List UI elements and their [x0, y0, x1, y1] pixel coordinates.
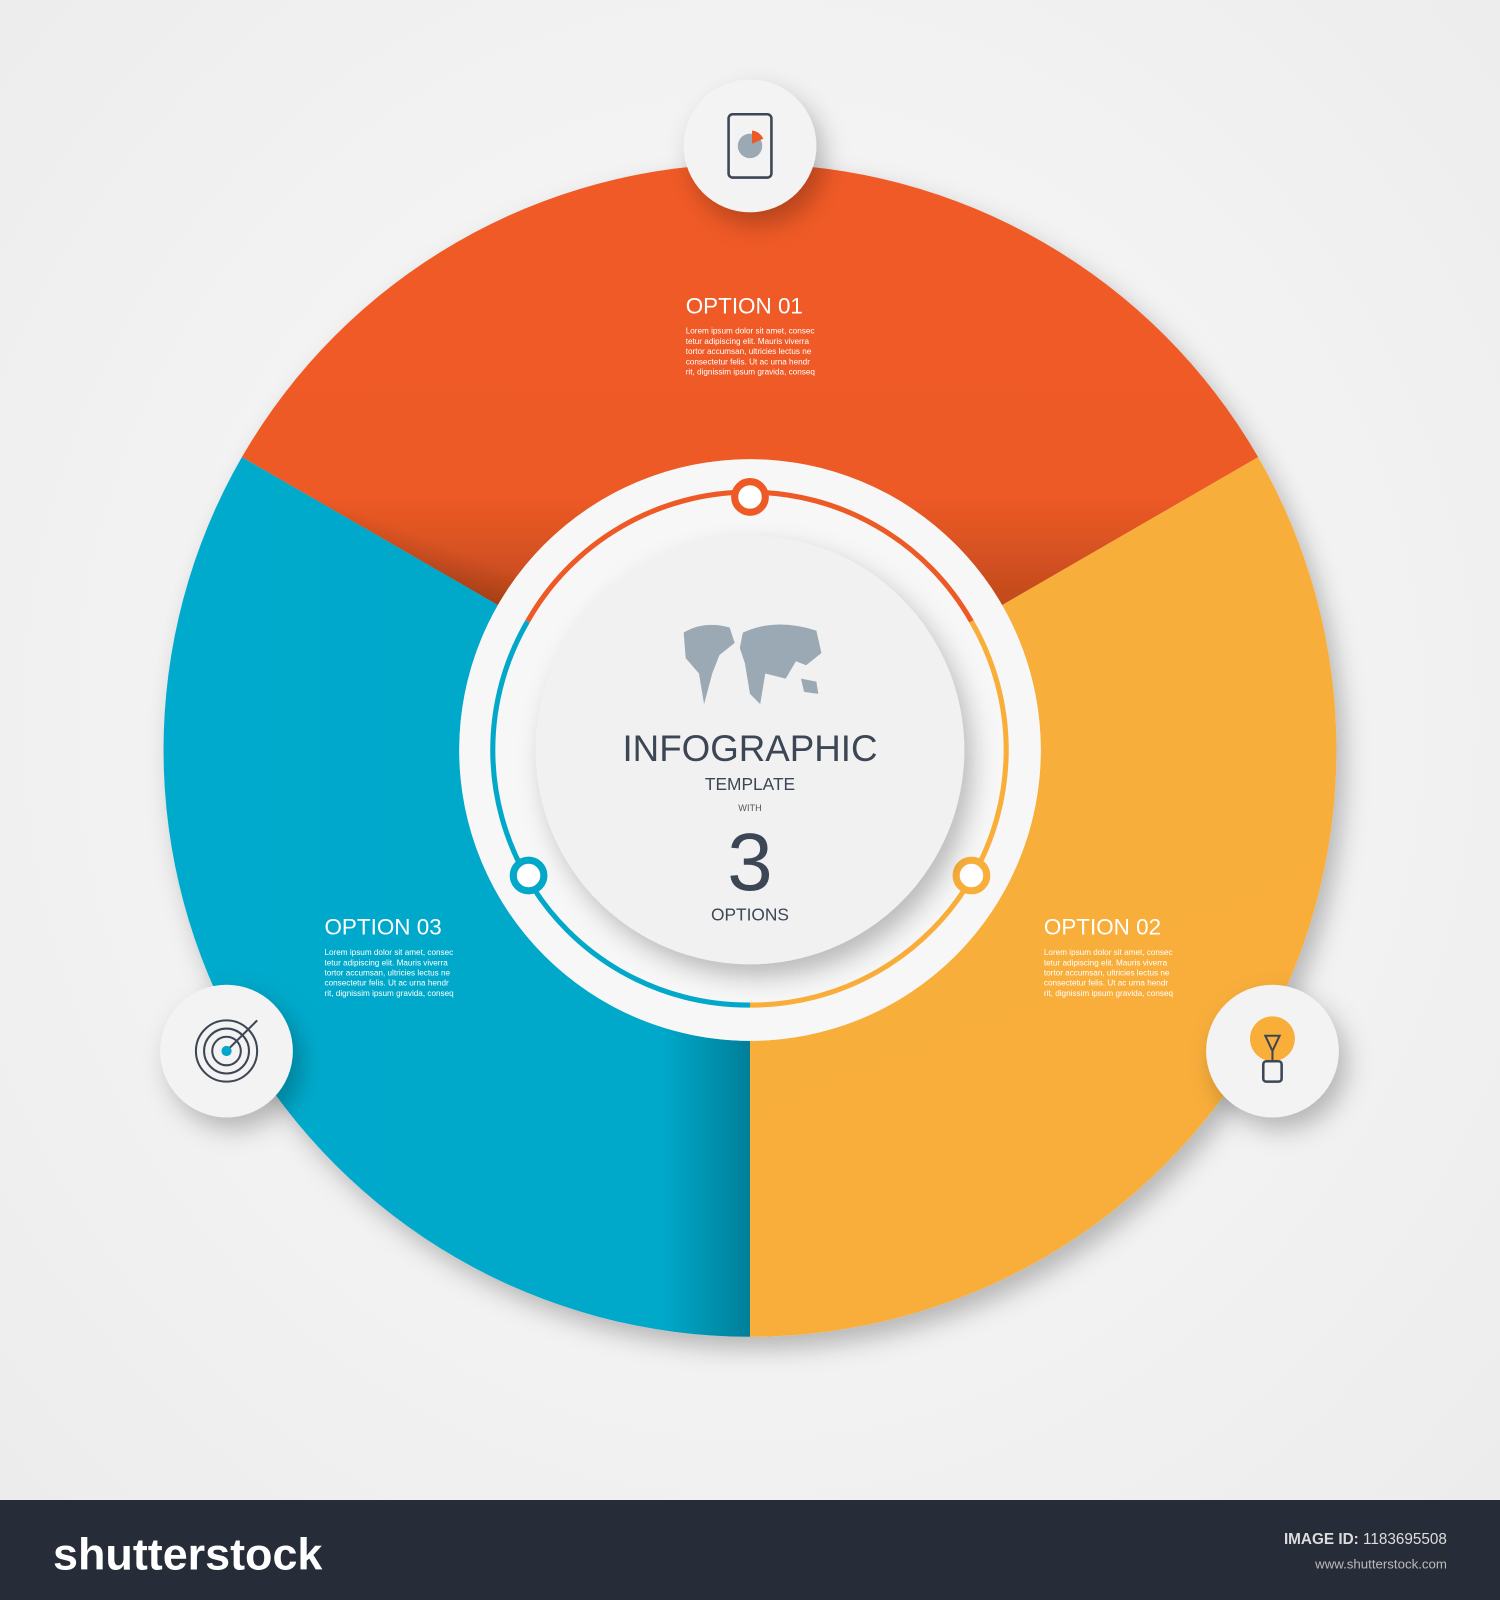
- footer bar: www.shutterstock.com: [1314, 1556, 1447, 1571]
- text: option 02: Lorem ipsum dolor sit amet, consec: [1044, 948, 1173, 957]
- footer bar: [0, 1500, 1500, 1600]
- text: option 01: Lorem ipsum dolor sit amet, consec: [686, 327, 814, 336]
- segment: option 02 yellow: [750, 457, 1336, 1337]
- text: option 01: [686, 293, 815, 376]
- text: option 02: [1044, 915, 1174, 998]
- text: option 02: consectetur felis. Ut ac urna hendr: [1044, 979, 1168, 988]
- text: option 01: tetur adipiscing elit. Mauris viverra: [686, 337, 809, 346]
- text: option 01: tortor accumsan, ultricies lectus ne: [686, 347, 812, 356]
- marker: blue: [513, 860, 544, 891]
- marker: yellow: [956, 860, 987, 891]
- icon badge: target: [160, 985, 293, 1117]
- text: option 03: tortor accumsan, ultricies lectus ne: [324, 969, 451, 978]
- text: option 03: rit, dignissim ipsum gravida, conseq: [324, 989, 454, 998]
- inner white ring: [459, 459, 1041, 1041]
- center disc: [536, 536, 964, 964]
- text: option 02: tetur adipiscing elit. Mauris viverra: [1044, 958, 1168, 967]
- icon: world map: [684, 624, 821, 704]
- text: option 01: rit, dignissim ipsum gravida, conseq: [686, 367, 815, 376]
- footer bar: shutterstock: [53, 1528, 322, 1579]
- center disc: OPTIONS: [711, 904, 789, 924]
- center disc: TEMPLATE: [705, 774, 795, 794]
- icon badge: phone chart: [684, 80, 816, 212]
- footer bar: IMAGE ID: 1183695508: [1284, 1531, 1447, 1548]
- text: option 03: [324, 915, 454, 998]
- marker: orange: [735, 482, 765, 512]
- text: option 03: tetur adipiscing elit. Mauris viverra: [324, 958, 448, 967]
- text: option 03: OPTION 03: [324, 915, 442, 940]
- text: option 02: OPTION 02: [1044, 915, 1161, 940]
- segment: option 03 blue: [164, 457, 750, 1337]
- text: option 01: OPTION 01: [686, 293, 803, 318]
- progress arcs: [493, 492, 1006, 1005]
- text: option 02: rit, dignissim ipsum gravida, conseq: [1044, 989, 1174, 998]
- text: option 03: consectetur felis. Ut ac urna hendr: [324, 979, 449, 988]
- icon badge: lightbulb: [1206, 985, 1339, 1117]
- ring chart: [164, 164, 1336, 1337]
- center disc: WITH: [738, 803, 762, 813]
- text: option 02: tortor accumsan, ultricies lectus ne: [1044, 969, 1170, 978]
- text: option 03: Lorem ipsum dolor sit amet, consec: [324, 948, 453, 957]
- segment: option 01 orange: [242, 164, 1258, 605]
- text: option 01: consectetur felis. Ut ac urna hendr: [686, 357, 810, 366]
- title: INFOGRAPHIC: [622, 728, 878, 769]
- center disc: 3: [727, 817, 773, 908]
